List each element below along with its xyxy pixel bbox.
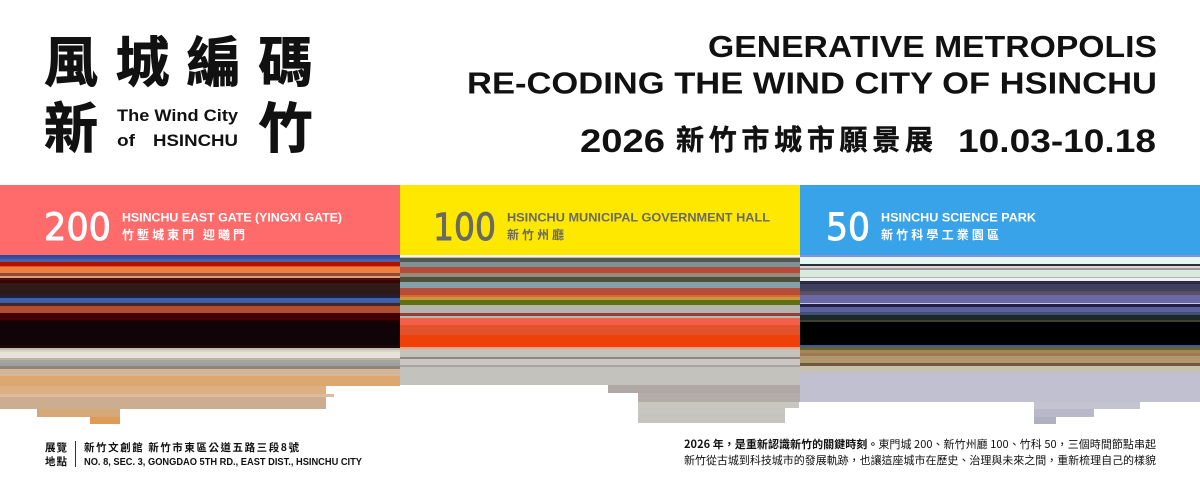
heading: exhibition name and dates: 2026: [580, 123, 665, 159]
venue address: 新竹文創館 新竹市東區公道五路三段8號: [84, 440, 300, 455]
panel: 100 municipal government hall header: [400, 185, 800, 255]
description text: 新竹從古城到科技城市的發展軌跡，也讓這座城市在歷史、治理與未來之間，重新梳理自己的樣貌: [684, 452, 1156, 468]
panel: 100 municipal government hall header: HSINCHU MUNICIPAL GOVERNMENT HALL: [507, 212, 770, 225]
heading: exhibition name and dates: 新竹市城市願景展: [676, 118, 933, 158]
logo english subtitle: HSINCHU: [153, 132, 238, 150]
logo character grid: 風: [44, 18, 98, 98]
panel: 200 hsinchu east gate header: [0, 185, 400, 255]
panel: 100 municipal government hall header: 新竹州廳: [507, 226, 564, 243]
panel: 50 science park header: 新竹科學工業園區: [881, 226, 999, 243]
venue label: 地點: [45, 454, 68, 469]
logo character grid: [44, 18, 312, 164]
description text: [684, 436, 1156, 468]
venue address: [84, 440, 363, 468]
panel: 50 science park header: 50: [826, 206, 870, 249]
heading: exhibition name and dates: [580, 118, 1156, 159]
venue divider: [75, 441, 76, 467]
panel: 100 municipal government hall header: 100: [433, 206, 496, 249]
logo character grid: 新: [44, 84, 98, 164]
heading: english exhibition title: [467, 30, 1157, 100]
panel: 200 hsinchu east gate header: 200: [44, 206, 111, 249]
panel: 50 science park header: [800, 185, 1200, 255]
logo character grid: 碼: [258, 18, 312, 98]
description text: 2026 年，是重新認識新竹的關鍵時刻。東門城 200、新竹州廳 100、竹科 50，三個時間節點串起: [684, 436, 1156, 452]
panel: 200 hsinchu east gate header: HSINCHU EAST GATE (YINGXI GATE): [122, 212, 342, 225]
chart: colour stripes science park: [800, 255, 1200, 424]
chart: colour stripes government hall: [400, 255, 800, 423]
venue address: NO. 8, SEC. 3, GONGDAO 5TH RD., EAST DIST., HSINCHU CITY: [84, 457, 363, 468]
heading: english exhibition title: RE-CODING THE WIND CITY OF HSINCHU: [467, 66, 1157, 100]
panel: 200 hsinchu east gate header: 竹塹城東門 迎曦門: [122, 226, 245, 243]
logo character grid: 城: [116, 18, 170, 98]
heading: english exhibition title: GENERATIVE METROPOLIS: [708, 30, 1157, 64]
logo english subtitle: [117, 107, 239, 150]
heading: exhibition name and dates: 10.03-10.18: [958, 123, 1156, 159]
logo character grid: 編: [186, 18, 240, 98]
logo english subtitle: The Wind City: [117, 107, 239, 125]
panel: 50 science park header: HSINCHU SCIENCE PARK: [881, 212, 1037, 225]
logo character grid: 竹: [258, 84, 312, 164]
logo: wind city chinese title: [44, 18, 312, 164]
venue label: 展覽: [45, 440, 68, 455]
chart: colour stripes east gate: [0, 255, 400, 424]
logo english subtitle: of: [117, 132, 136, 150]
venue label: [45, 440, 68, 469]
